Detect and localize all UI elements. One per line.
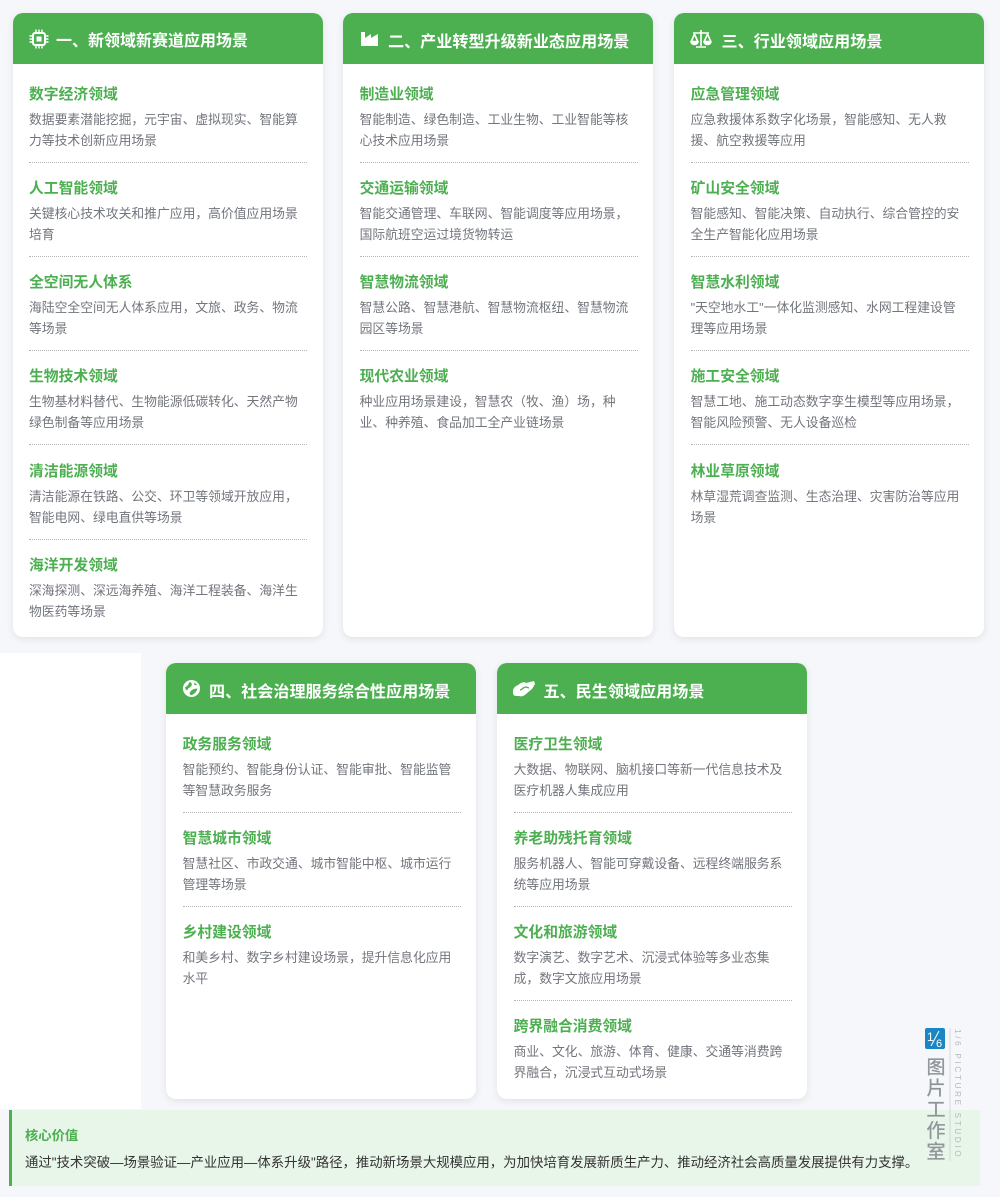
panel header: section five: 五、民生领域应用场景	[544, 683, 704, 701]
item: transportation: 交通运输领域	[360, 180, 448, 196]
item: elderly and child care: 服务机器人、智能可穿戴设备、远程终端服务系	[514, 856, 782, 871]
item: smart logistics: 智慧公路、智慧港航、智慧物流枢纽、智慧物流	[360, 300, 628, 315]
item: construction safety: 智慧工地、施工动态数字孪生模型等应用场景，	[691, 394, 959, 409]
item: mine safety: 智能感知、智能决策、自动执行、综合管控的安	[691, 206, 959, 221]
item: artificial intelligence: 培育	[29, 227, 55, 242]
item: modern agriculture: 现代农业领域	[360, 368, 448, 384]
panel: social governance	[166, 663, 476, 1099]
panel: industry sectors	[674, 13, 984, 637]
panel header: section two: 二、产业转型升级新业态应用场景	[388, 33, 629, 51]
item: culture and tourism: 文化和旅游领域	[514, 924, 617, 940]
item: digital economy: 数据要素潜能挖掘，元宇宙、虚拟现实、智能算	[29, 112, 298, 127]
panel header: section five	[497, 663, 807, 714]
panel: industrial transformation	[343, 13, 653, 637]
item: transportation: 国际航班空运过境货物转运	[360, 227, 513, 242]
item: smart water: "天空地水工"一体化监测感知、水网工程建设管	[691, 300, 956, 315]
watermark: 1/6 picture studio: 1/6 PICTURE STUDIO	[953, 1029, 962, 1159]
item: manufacturing: 制造业领域	[360, 86, 434, 102]
panel header: section three: 三、行业领域应用场景	[722, 33, 882, 51]
item: biotechnology: 绿色制备等应用场景	[29, 415, 144, 430]
white blank area	[0, 653, 141, 1109]
item: biotechnology: 生物基材料替代、生物能源低碳转化、天然产物	[29, 394, 298, 409]
item: smart water	[691, 274, 969, 351]
item: rural construction: 乡村建设领域	[183, 924, 271, 940]
panel header: section one	[13, 13, 323, 64]
callout: core value	[9, 1110, 980, 1186]
item: forestry and grassland	[691, 463, 959, 525]
item: modern agriculture: 种业应用场景建设，智慧农（牧、渔）场，种	[360, 394, 616, 409]
item: manufacturing: 心技术应用场景	[360, 133, 449, 148]
item: ocean development: 物医药等场景	[29, 604, 106, 619]
watermark: 1/6 picture studio: 作	[926, 1120, 946, 1142]
item: healthcare	[514, 736, 792, 813]
panel header: section three	[674, 13, 984, 64]
item: biotechnology	[29, 368, 307, 445]
panel: new fields and new tracks	[13, 13, 323, 637]
item: construction safety: 智能风险预警、无人设备巡检	[691, 415, 857, 430]
item: emergency management: 援、航空救援等应用	[691, 133, 806, 148]
item: smart logistics: 智慧物流领域	[360, 274, 448, 290]
item: smart city: 智慧社区、市政交通、城市智能中枢、城市运行	[183, 856, 451, 871]
panel header: section two	[343, 13, 653, 64]
item: smart city: 智慧城市领域	[183, 830, 271, 846]
item: digital economy: 力等技术创新应用场景	[29, 133, 157, 148]
item: forestry and grassland: 林草湿荒调查监测、生态治理、灾害防治等应用	[691, 489, 959, 504]
item: rural construction	[183, 924, 451, 986]
panel header: section one: 一、新领域新赛道应用场景	[56, 33, 248, 50]
watermark: 1/6 picture studio: 片	[926, 1078, 946, 1100]
item: clean energy: 智能电网、绿电直供等场景	[29, 510, 183, 525]
item: clean energy: 清洁能源领域	[29, 464, 118, 480]
item: manufacturing: 智能制造、绿色制造、工业生物、工业智能等核	[360, 112, 628, 127]
item: transportation	[360, 180, 638, 257]
item: culture and tourism: 成，数字文旅应用场景	[514, 971, 642, 986]
watermark: 1/6 picture studio: 工	[926, 1100, 946, 1121]
item: transportation: 智能交通管理、车联网、智能调度等应用场景，	[360, 206, 628, 221]
item: healthcare: 医疗机器人集成应用	[514, 783, 629, 798]
item: smart logistics	[360, 274, 638, 351]
item: mine safety	[691, 180, 969, 257]
item: mine safety: 全生产智能化应用场景	[691, 227, 819, 242]
callout heading: 核心价值	[25, 1128, 78, 1143]
item: cross-border consumption	[514, 1018, 782, 1080]
item: smart city	[183, 830, 461, 907]
item: cross-border consumption: 商业、文化、旅游、体育、健康、交通等消费跨	[514, 1044, 782, 1059]
item: artificial intelligence: 关键核心技术攻关和推广应用，高价值应用场景	[29, 206, 298, 221]
watermark: 1/6 picture studio: 图	[926, 1058, 946, 1078]
item: unmanned systems	[29, 274, 307, 351]
item: unmanned systems: 海陆空全空间无人体系应用，文旅、政务、物流	[29, 300, 298, 315]
item: manufacturing	[360, 86, 638, 163]
item: elderly and child care: 统等应用场景	[514, 877, 590, 892]
watermark: 1/6 picture studio: 1	[927, 1030, 934, 1044]
item: emergency management	[691, 86, 969, 163]
item: healthcare: 医疗卫生领域	[514, 736, 602, 752]
item: smart logistics: 园区等场景	[360, 321, 424, 336]
item: ocean development: 深海探测、深远海养殖、海洋工程装备、海洋生	[29, 583, 298, 598]
item: smart city: 管理等场景	[183, 877, 247, 892]
item: digital economy: 数字经济领域	[29, 86, 118, 102]
item: artificial intelligence: 人工智能领域	[29, 180, 118, 196]
item: ocean development: 海洋开发领域	[29, 558, 118, 574]
item: modern agriculture	[360, 368, 616, 430]
item: elderly and child care: 养老助残托育领域	[514, 830, 632, 846]
panel header: section four: 四、社会治理服务综合性应用场景	[209, 683, 450, 701]
item: rural construction: 和美乡村、数字乡村建设场景，提升信息化应用	[183, 950, 451, 965]
item: emergency management: 应急管理领域	[691, 86, 779, 102]
item: clean energy: 清洁能源在铁路、公交、环卫等领域开放应用，	[29, 489, 298, 504]
item: government services	[182, 736, 461, 813]
watermark: 1/6 picture studio	[925, 1028, 962, 1162]
item: digital economy	[29, 86, 307, 163]
panel: livelihood	[497, 663, 807, 1099]
item: rural construction: 水平	[183, 971, 208, 986]
item: unmanned systems: 全空间无人体系	[29, 274, 133, 290]
item: smart water: 理等应用场景	[691, 321, 767, 336]
item: modern agriculture: 业、种养殖、食品加工全产业链场景	[360, 415, 564, 430]
item: cross-border consumption: 跨界融合消费领域	[514, 1018, 632, 1034]
item: biotechnology: 生物技术领域	[29, 368, 118, 384]
item: clean energy	[29, 463, 307, 540]
item: forestry and grassland: 场景	[691, 510, 716, 525]
item: government services: 智能预约、智能身份认证、智能审批、智能监管	[183, 762, 451, 777]
item: elderly and child care	[514, 830, 792, 907]
item: healthcare: 大数据、物联网、脑机接口等新一代信息技术及	[514, 762, 782, 777]
item: smart water: 智慧水利领域	[691, 274, 779, 290]
item: culture and tourism: 数字演艺、数字艺术、沉浸式体验等多业态集	[514, 950, 770, 965]
callout text: 通过"技术突破—场景验证—产业应用—体系升级"路径，推动新场景大规模应用，为加快培育发展新质生产力、推动经济社会高质量发展提供有力支撑。	[25, 1155, 918, 1170]
item: unmanned systems: 等场景	[29, 321, 67, 336]
item: emergency management: 应急救援体系数字化场景，智能感知、无人救	[691, 112, 947, 127]
item: government services: 等智慧政务服务	[183, 783, 272, 798]
item: construction safety	[691, 368, 969, 445]
item: cross-border consumption: 界融合，沉浸式互动式场景	[514, 1065, 667, 1080]
item: culture and tourism	[514, 924, 792, 1001]
item: government services: 政务服务领域	[183, 736, 271, 752]
watermark: 1/6 picture studio: 6	[936, 1038, 942, 1050]
item: mine safety: 矿山安全领域	[691, 180, 779, 196]
panel header: section four	[166, 663, 476, 714]
item: ocean development	[29, 557, 298, 619]
item: artificial intelligence	[29, 180, 307, 257]
item: forestry and grassland: 林业草原领域	[691, 464, 779, 480]
item: construction safety: 施工安全领域	[691, 368, 779, 384]
